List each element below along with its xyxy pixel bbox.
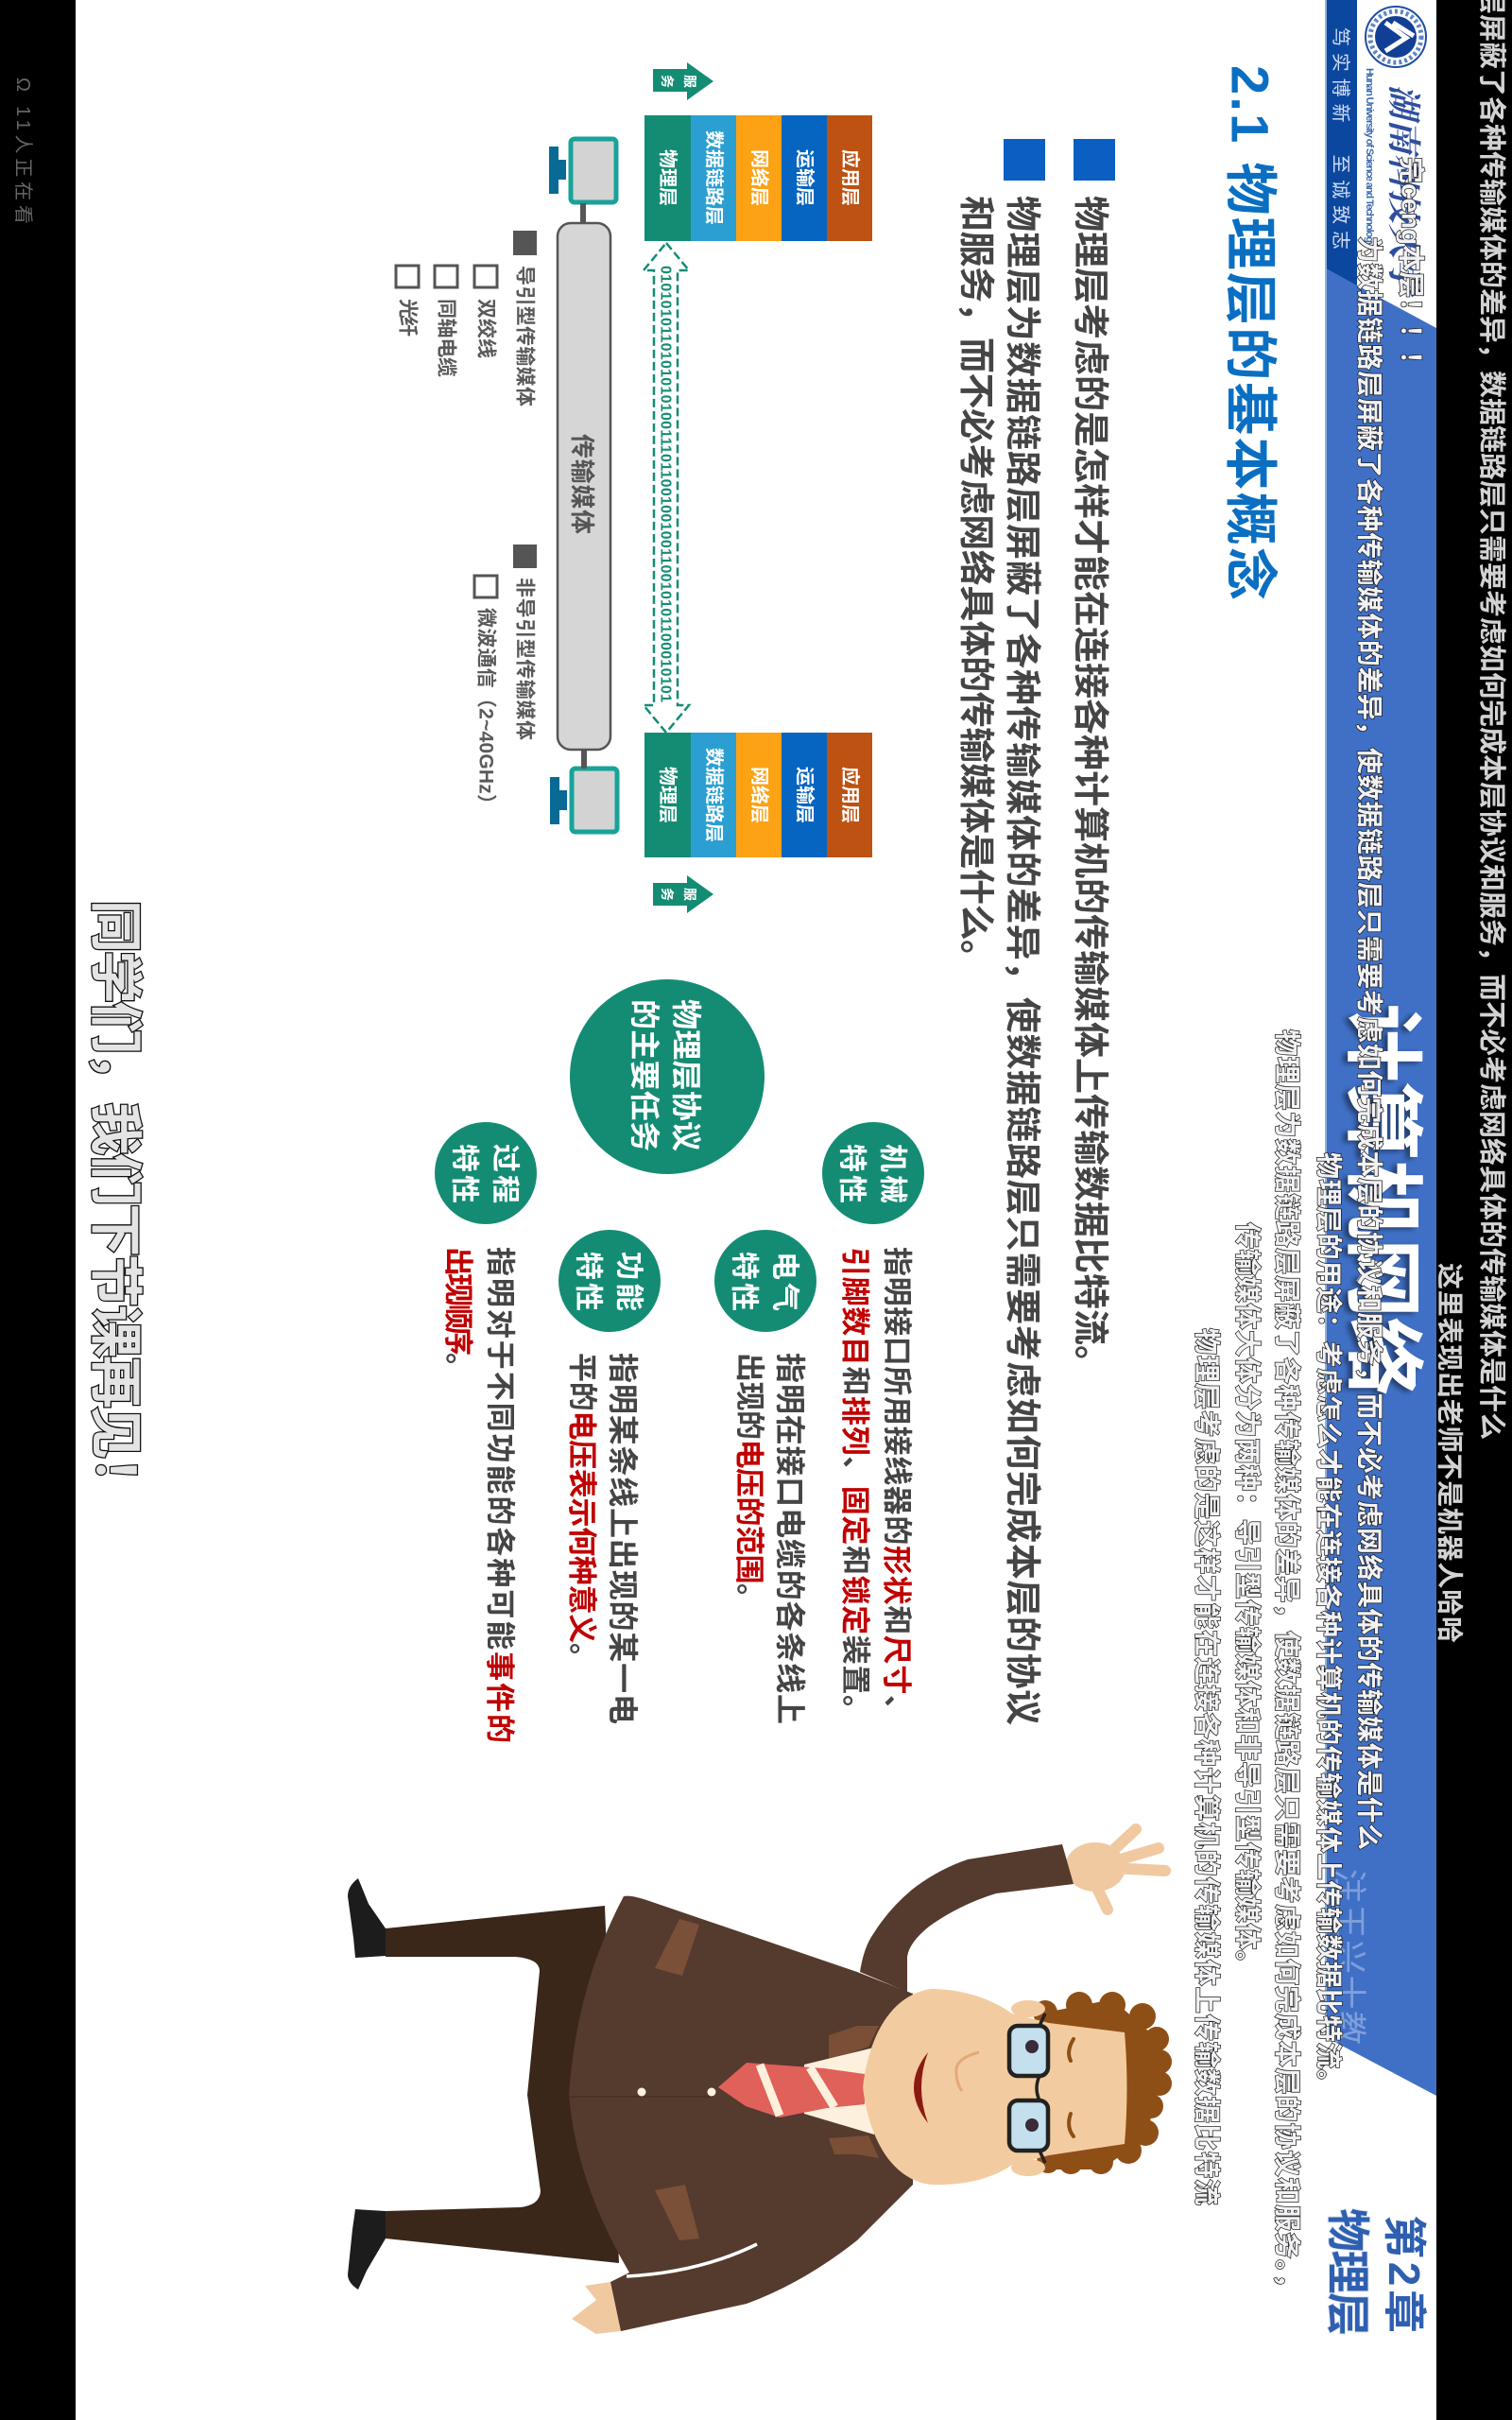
protocol stack: right host: 物理层 (657, 767, 679, 823)
sleeve highlight (627, 2244, 757, 2276)
banner title: 计算机网络 (1338, 1003, 1427, 1396)
lower hand (572, 2282, 621, 2334)
protocol stack: left host (644, 115, 872, 241)
raised arm (860, 1844, 1074, 1992)
icon: university logo (1366, 7, 1426, 67)
functional characteristic: 平的 电压表示何种意义 。 (565, 1353, 599, 1672)
black caption comment: 这里表现出老师不是机器人哈哈 (1435, 1263, 1465, 1643)
bullet point block: 和服务，而不必考虑网络具体的传输媒体是什么。 (955, 196, 995, 976)
legend: unguided media: 微波通信（2~40GHz） (474, 608, 497, 814)
shirt (804, 2048, 874, 2135)
arrow: service bottom (653, 875, 713, 913)
shoe: lower (348, 2209, 386, 2290)
legend: guided media: 光纤 (397, 299, 418, 337)
legend: guided media: 同轴电缆 (435, 299, 457, 377)
trousers (386, 1906, 619, 2263)
central circle: main tasks: 的主要任务 (627, 999, 662, 1151)
procedural characteristic: 特性 (448, 1144, 480, 1203)
mechanical characteristic: 引脚数目 和 排列 、 固定 和 锁定 装置。 (839, 1247, 871, 1724)
protocol stack: left host: 数据链路层 (703, 130, 725, 225)
chapter label: 第2章 (1380, 2215, 1429, 2333)
viewer count: Ω 11人正在看 (12, 78, 34, 224)
arrow: service top: 务 (660, 75, 675, 88)
mechanical characteristic: 指明接口所用接线器的 形状 和 尺寸 、 (881, 1247, 913, 1724)
protocol stack: left host: 网络层 (748, 149, 771, 206)
top black caption: 层屏蔽了各种传输媒体的差异，数据链路层只需要考虑如何完成本层协议和服务，而不必考虑网络具体的传输媒体是什么 (1476, 0, 1507, 1440)
transmission medium tube: 传输媒体 (568, 434, 596, 534)
chapter label: 物理层 (1323, 2208, 1372, 2336)
arrow: service top: 服 (682, 75, 697, 88)
tie (718, 2063, 865, 2118)
subtitle overlays: 传输媒体大体分为两种：导引型传输媒体和非导引型传输媒体。 (1232, 1222, 1263, 1977)
arrow: service top (653, 62, 713, 100)
subtitle overlays: 物理层考虑的是这样才能在连接各种计算机的传输媒体上传输数据比特流 (1193, 1328, 1221, 2205)
bullet point block (955, 139, 1115, 1725)
mechanical characteristic: 特性 (835, 1144, 868, 1203)
arrow: bit stream double arrow (644, 243, 689, 733)
bullet point block: 物理层为数据链路层屏蔽了各种传输媒体的差异，使数据链路层只需要考虑如何完成本层的协议 (1002, 196, 1041, 1725)
arrow: service bottom: 务 (660, 888, 675, 901)
bullet point block: 物理层考虑的是怎样才能在连接各种计算机的传输媒体上传输数据比特流。 (1070, 196, 1109, 1381)
protocol stack: right host: 网络层 (748, 767, 771, 823)
electrical characteristic: 指明在接口电缆的各条线上 (773, 1353, 807, 1724)
electrical characteristic: 电气 (769, 1252, 799, 1311)
procedural characteristic (435, 1122, 537, 1743)
central circle: main tasks: 物理层协议 (669, 999, 703, 1151)
coat body (569, 1896, 913, 2331)
head (863, 1989, 1126, 2185)
shoe: upper (348, 1878, 386, 1958)
nose (956, 2052, 979, 2091)
ears (1011, 2000, 1045, 2017)
protocol stack: left host: 应用层 (839, 149, 862, 206)
functional characteristic: 特性 (573, 1252, 603, 1311)
central circle: main tasks (570, 979, 765, 1174)
collar (829, 2026, 879, 2061)
arrow: service bottom: 服 (682, 888, 697, 901)
procedural characteristic: 指明对于不同功能的各种可能 事件的 (484, 1247, 516, 1743)
section heading: 2.1 物理层的基本概念 (1221, 65, 1280, 600)
mechanical characteristic (822, 1122, 924, 1724)
cartoon teacher (348, 1829, 1172, 2334)
subtitle overlays: 物理层为数据链路层屏蔽了各种传输媒体的差异，使数据链路层只需要考虑如何完成本层的协议和服务。， (1272, 1029, 1302, 2300)
protocol stack: right host: 数据链路层 (703, 748, 725, 842)
legend: unguided media: 非导引型传输媒体 (514, 578, 535, 740)
university name calligraphy: 湖南科技大学 (1384, 84, 1422, 298)
electrical characteristic: 特性 (728, 1252, 760, 1311)
closing subtitle: 同学们，我们下节课再见！ (85, 900, 146, 1510)
legend: guided media: 双绞线 (474, 299, 497, 358)
functional characteristic: 指明某条线上出现的某一电 (606, 1353, 640, 1724)
legend: guided media: 导引型传输媒体 (514, 266, 535, 406)
electrical characteristic: 出现的 电压的范围 。 (733, 1353, 765, 1613)
procedural characteristic: 出现顺序。 (442, 1247, 474, 1382)
hair (1033, 1992, 1172, 2174)
protocol stack: left host: 物理层 (657, 149, 679, 206)
subtitle overlays: 物理层的用途：考虑怎么才能在连接各种计算机的传输媒体上传输数据比特流。 (1314, 1152, 1344, 2096)
protocol stack: right host: 应用层 (839, 767, 862, 823)
computer: top host (549, 139, 616, 222)
glasses (1009, 2014, 1048, 2163)
faint banner subtitle: 注王兴十教 (1331, 1869, 1368, 2045)
protocol stack: left host: 运输层 (794, 149, 816, 206)
mechanical characteristic: 机械 (877, 1144, 907, 1203)
raised hand (1065, 1829, 1165, 1910)
chapter label (1323, 2208, 1429, 2336)
eyebrows (1069, 2039, 1074, 2136)
coat buttons (569, 2087, 716, 2097)
university english name: Hunan University of Science and Technology (1364, 68, 1375, 249)
mouth (914, 2052, 928, 2123)
functional characteristic (558, 1230, 661, 1724)
computer: bottom host (550, 750, 617, 832)
subtitle overlays (1193, 157, 1425, 2300)
university motto: 笃实博新 至诚致志 (1330, 27, 1351, 250)
subtitle overlays: 为数据链路层屏蔽了各种传输媒体的差异，使数据链路层只需要考虑如何完成本层的协议和服务，而不必考虑网络具体的传输媒体是什么 (1355, 236, 1383, 1850)
slide header banner (1326, 0, 1436, 2096)
functional characteristic: 功能 (612, 1252, 644, 1311)
legend: guided media (396, 231, 537, 406)
coat pockets (655, 1919, 699, 1976)
legend: unguided media (474, 544, 537, 814)
arrow: bit stream double arrow: 010101011010101010011101100100100110010101100010101 (658, 266, 673, 702)
electrical characteristic (714, 1230, 816, 1724)
transmission medium tube (558, 223, 610, 750)
protocol stack: right host: 运输层 (794, 767, 816, 823)
subtitle overlays: 完ceng本层！！！ (1397, 157, 1425, 377)
procedural characteristic: 过程 (490, 1144, 520, 1203)
protocol stack: right host (644, 733, 872, 857)
